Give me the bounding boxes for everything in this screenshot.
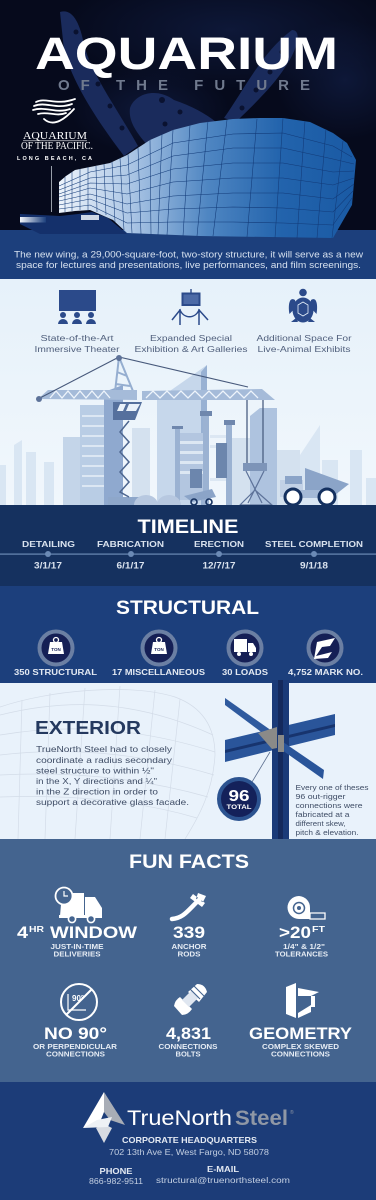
timeline track (0, 551, 376, 557)
milestones: STEEL COMPLETION (265, 539, 363, 549)
callout: 96 total (219, 752, 270, 819)
steel column and beams (225, 680, 335, 839)
aquarium of the pacific logo: AQUARIUM (23, 130, 87, 142)
phone (89, 1167, 144, 1186)
icon: theater (58, 290, 96, 324)
stat: geometry (249, 1024, 353, 1058)
milestones: 12/7/17 (202, 560, 236, 570)
stat: bolts: 4,831 (166, 1024, 211, 1043)
dump truck (280, 468, 349, 505)
stat: no 90 (33, 1024, 117, 1058)
callout: 96 total: TOTAL (226, 804, 252, 811)
body text: coordinate a radius secondary (36, 755, 173, 765)
stat: anchor rods (172, 923, 207, 958)
stat: no 90: NO 90° (44, 1024, 107, 1043)
phone: 866-982-9511 (89, 1177, 144, 1186)
icon: turtle (289, 289, 317, 322)
stat: geometry: GEOMETRY (249, 1024, 353, 1043)
icon: steel mark (308, 632, 342, 664)
stat: window: WINDOW (50, 923, 138, 942)
panel: features and construction (0, 279, 376, 506)
phone: PHONE (100, 1167, 133, 1176)
connection note: fabricated at a (296, 810, 351, 819)
milestones (22, 539, 363, 570)
stat: window: HR (29, 925, 44, 934)
body text: TrueNorth Steel had to closely (36, 744, 173, 754)
headquarters address: 702 13th Ave E, West Fargo, ND 58078 (109, 1147, 269, 1157)
body text: in the X, Y directions and ¼" (36, 776, 157, 786)
connection note: different skew, (296, 819, 346, 828)
city skyline (0, 365, 376, 505)
email: E-MAIL (207, 1165, 239, 1174)
connection note: Every one of theses (296, 783, 369, 792)
icon: no 90 degrees: 90° (72, 994, 84, 1003)
tower crane (36, 355, 275, 505)
truenorth star logo (83, 1092, 125, 1143)
icon: ton weight (40, 632, 72, 664)
aquarium of the pacific logo: LONG BEACH, CA (17, 156, 92, 162)
truenorth wordmark: ® (290, 1109, 294, 1116)
feature captions: State-of-the-Art (40, 333, 114, 343)
stat labels: 4,752 MARK NO. (288, 667, 363, 677)
stat: no 90: CONNECTIONS (46, 1052, 105, 1058)
feature captions: Exhibition & Art Galleries (134, 344, 248, 354)
aquarium building (59, 118, 356, 238)
panel: footer (0, 1082, 376, 1200)
heading: STRUCTURAL (116, 597, 259, 619)
stat: window: JUST-IN-TIME (50, 944, 104, 951)
connection note (296, 783, 369, 837)
aquarium of the pacific logo (17, 99, 93, 212)
stat: tolerances: 1/4" & 1/2" (283, 944, 325, 951)
small loader (184, 489, 216, 505)
feature captions (34, 333, 352, 354)
icon: tape measure (288, 896, 325, 919)
email: structural@truenorthsteel.com (156, 1176, 290, 1185)
milestones: DETAILING (22, 539, 75, 549)
stat: geometry: CONNECTIONS (271, 1052, 330, 1058)
milestones: FABRICATION (97, 539, 164, 549)
stat labels: 30 LOADS (222, 667, 268, 677)
feature captions: Immersive Theater (34, 344, 120, 354)
icon: ton weight: TON (154, 647, 164, 652)
icon: gallery (172, 289, 208, 325)
icon: anchor rod (172, 893, 206, 919)
ground band (0, 230, 376, 279)
stat: anchor rods: 339 (173, 923, 205, 942)
feature captions: Additional Space For (256, 333, 352, 343)
stat: tolerances: FT (312, 925, 325, 934)
email (156, 1165, 290, 1185)
stat labels: 350 STRUCTURAL (14, 667, 97, 677)
icon: ton weight: TON (51, 647, 61, 652)
lower annex (20, 212, 127, 234)
icon: bolt (174, 984, 207, 1015)
aquarium of the pacific logo: OF THE PACIFIC. (21, 141, 93, 152)
icon: no 90 degrees (61, 984, 97, 1020)
panel: structural (0, 586, 376, 683)
icon: skewed geometry (286, 983, 319, 1018)
milestones: ERECTION (194, 539, 244, 549)
stat: window: DELIVERIES (54, 952, 101, 958)
panel: hero header (0, 0, 376, 280)
intro text: The new wing, a 29,000-square-foot, two-story structure, it will serve as a new (14, 250, 363, 260)
heading: FUN FACTS (129, 851, 249, 873)
body text: support a decorative glass facade. (36, 797, 189, 807)
intro text: space for lectures and presentations, live performances, and film screenings. (16, 260, 361, 270)
callout: 96 total: 96 (228, 788, 250, 805)
icon: ton weight (142, 632, 176, 664)
panel: exterior (0, 680, 376, 839)
stat: anchor rods: RODS (178, 952, 201, 958)
stat labels: 17 MISCELLANEOUS (112, 667, 205, 677)
connection note: 96 out-rigger (296, 792, 346, 801)
headquarters address: CORPORATE HEADQUARTERS (122, 1136, 258, 1145)
turtle backdrop (60, 11, 298, 156)
stat: tolerances: >20 (279, 923, 311, 942)
stat: geometry: COMPLEX SKEWED (262, 1044, 339, 1051)
milestones: 6/1/17 (116, 560, 144, 570)
stat: tolerances: TOLERANCES (275, 952, 328, 958)
stat: no 90: OR PERPENDICULAR (33, 1044, 117, 1051)
body text: in the Z direction in order to (36, 786, 158, 796)
headquarters address (109, 1136, 269, 1157)
stat: tolerances (275, 923, 328, 958)
heading: TIMELINE (138, 516, 238, 538)
panel: fun facts (0, 839, 376, 1082)
feature captions: Live-Animal Exhibits (258, 344, 350, 354)
feature captions: Expanded Special (150, 333, 232, 343)
stat labels (14, 667, 363, 677)
stat: bolts: BOLTS (176, 1052, 201, 1058)
milestones: 3/1/17 (34, 560, 62, 570)
truenorth wordmark: TrueNorth (127, 1106, 232, 1130)
panel: timeline (0, 505, 376, 586)
stat: bolts: CONNECTIONS (158, 1044, 218, 1051)
icon: delivery truck with clock (56, 888, 102, 923)
icon: truck (228, 632, 262, 664)
stat: window (17, 923, 138, 958)
stat: anchor rods: ANCHOR (172, 944, 207, 951)
intro text (14, 250, 363, 270)
stat: bolts (158, 1024, 218, 1058)
connection note: pitch & elevation. (296, 828, 358, 837)
stat: window: 4 (17, 923, 29, 942)
truenorth wordmark: Steel (235, 1106, 288, 1130)
subtitle: OF THE FUTURE (58, 77, 310, 94)
heading: EXTERIOR (35, 717, 141, 738)
wireframe backdrop (0, 686, 215, 839)
body text: steel structure to within ½" (36, 766, 154, 776)
body text (36, 744, 189, 807)
truenorth wordmark (127, 1106, 294, 1130)
connection note: connections were (296, 801, 362, 810)
title: AQUARIUM (35, 28, 338, 79)
milestones: 9/1/18 (300, 560, 328, 570)
